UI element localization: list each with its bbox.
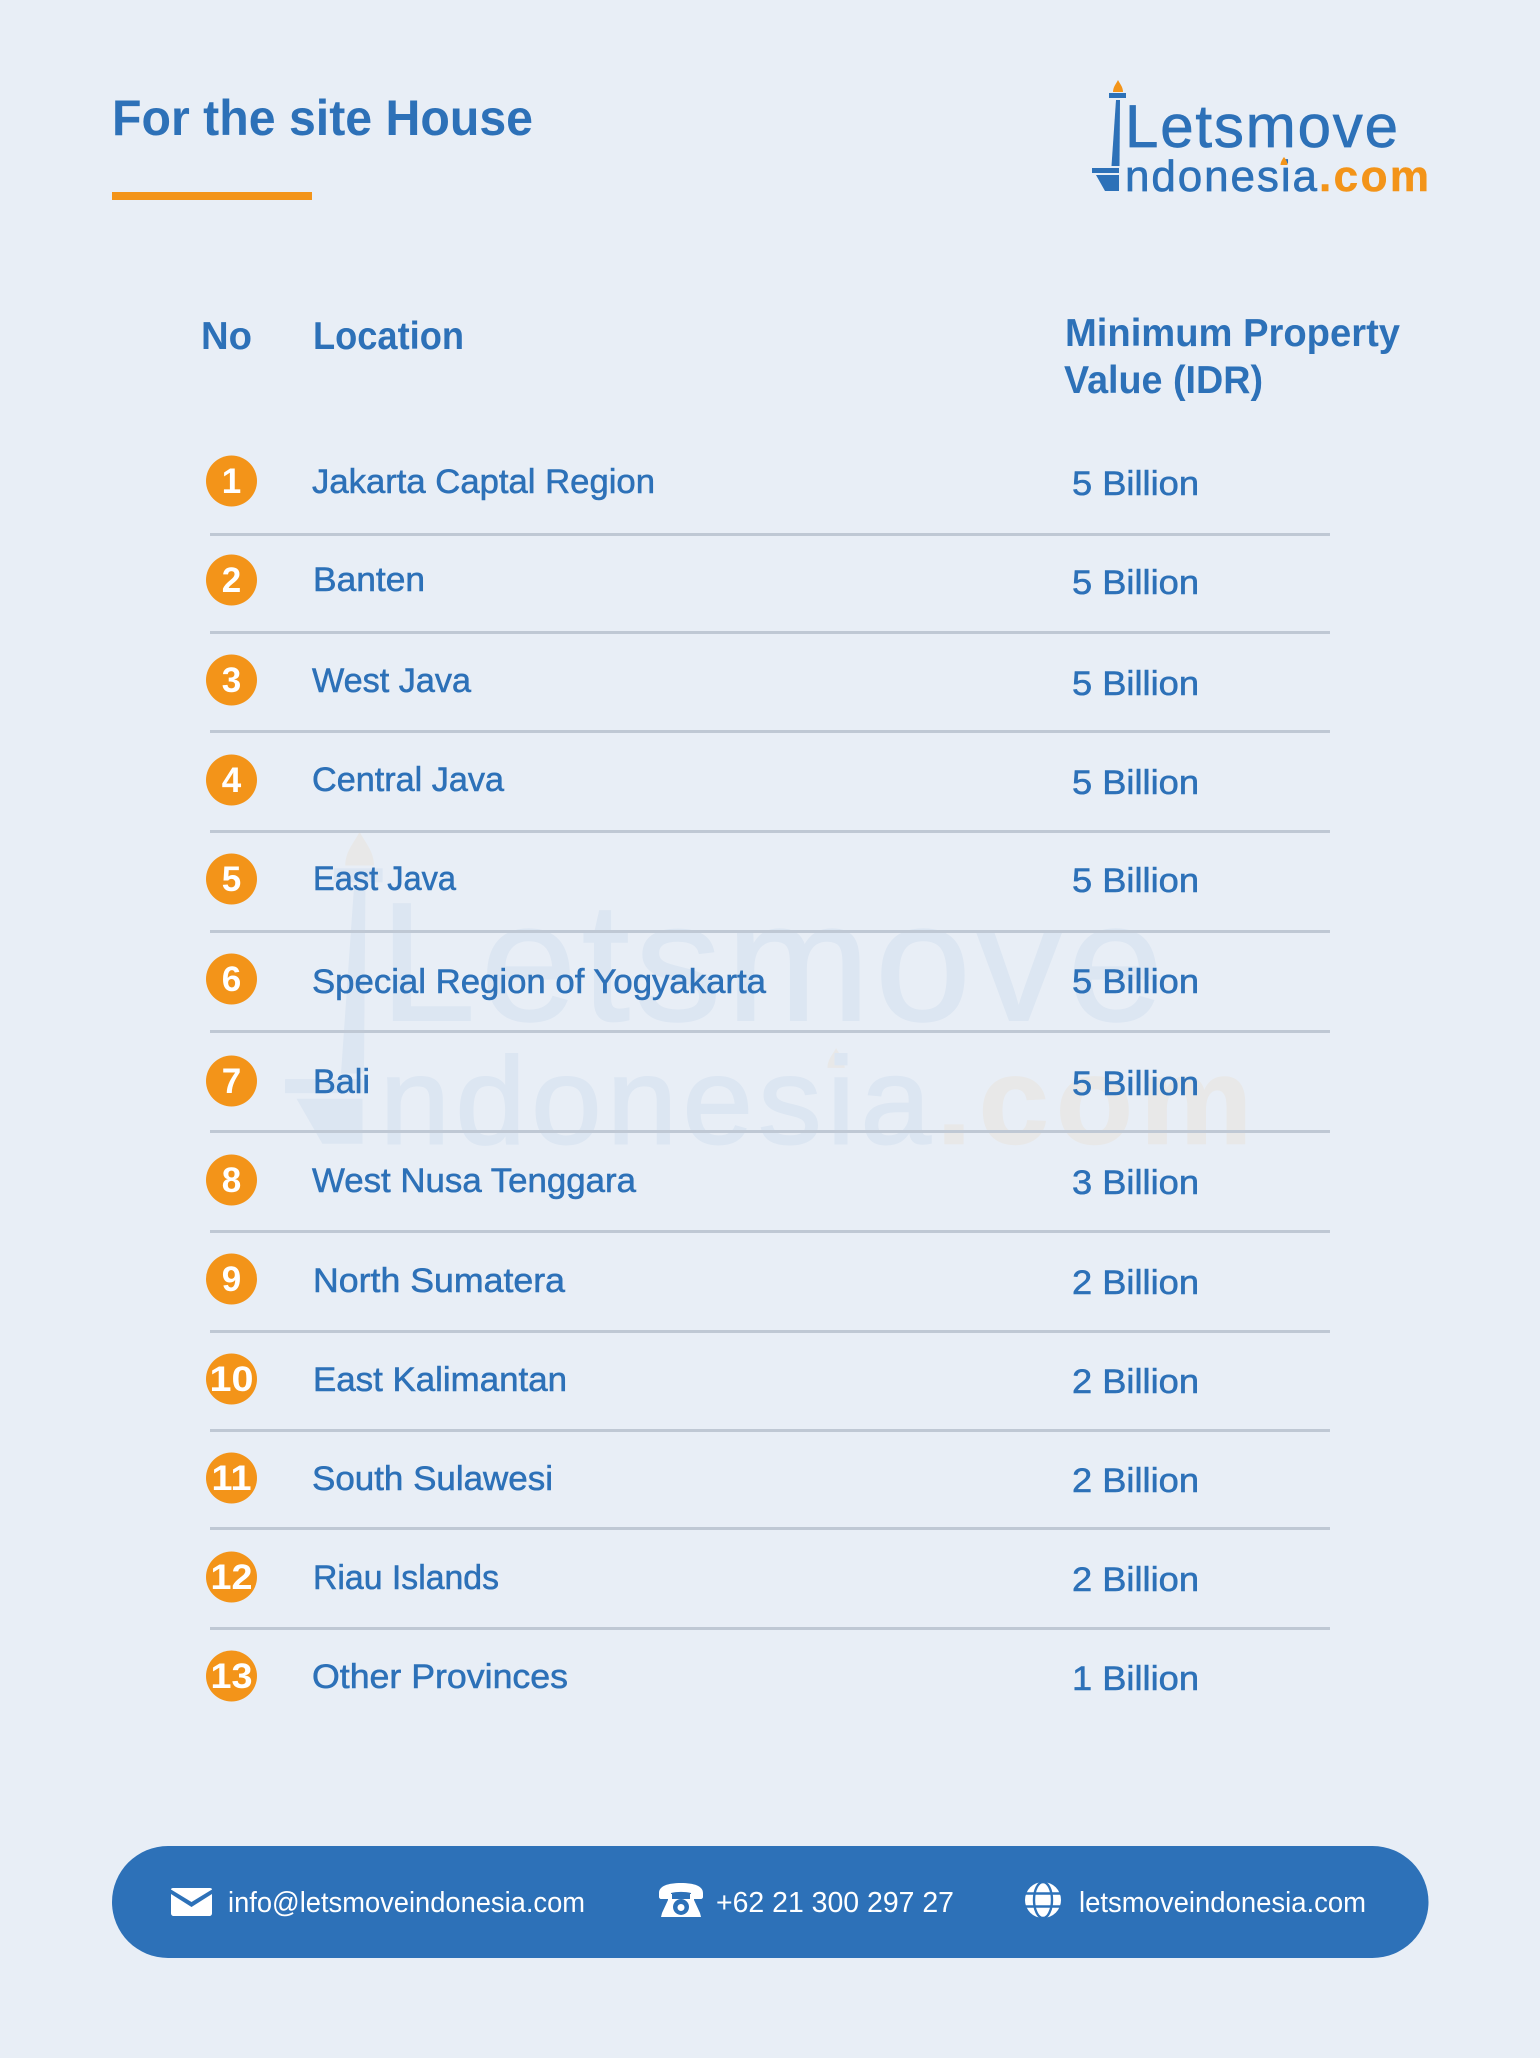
row 3 — [206, 654, 1330, 733]
row 10 — [206, 1354, 1330, 1432]
phone number: +62 21 300 297 27 — [716, 1887, 954, 1919]
row 8: 8 — [222, 1161, 241, 1200]
row 13: 1 Billion — [1072, 1660, 1199, 1698]
row 10: East Kalimantan — [313, 1361, 567, 1399]
row 1: 5 Billion — [1072, 465, 1199, 503]
table header: No: No — [201, 315, 252, 358]
row 5 — [206, 854, 1330, 933]
row 11: South Sulawesi — [312, 1460, 553, 1498]
row 6: Special Region of Yogyakarta — [312, 963, 766, 1001]
row 3: 5 Billion — [1072, 665, 1199, 703]
row 11 — [206, 1452, 1330, 1530]
table rows — [206, 456, 1330, 1702]
footer contact bar — [112, 1846, 1428, 1958]
watermark logo: Letsmove — [380, 869, 1163, 1057]
row 6: 6 — [222, 960, 241, 999]
row 1 — [206, 456, 1330, 536]
row 10: 10 — [210, 1360, 254, 1399]
row 2 — [206, 554, 1330, 634]
row 7: 7 — [222, 1062, 241, 1101]
table header: Minimum Property Value — [1064, 312, 1400, 402]
row 13: 13 — [210, 1657, 252, 1696]
email address: info@letsmoveindonesia.com — [228, 1887, 585, 1919]
row 2: Banten — [313, 561, 425, 599]
logo — [1092, 80, 1429, 201]
row 9: 2 Billion — [1072, 1264, 1199, 1302]
row 13: Other Provinces — [312, 1658, 568, 1696]
icon: monument — [1092, 80, 1126, 191]
row 12: 12 — [210, 1558, 252, 1597]
watermark logo — [285, 832, 1252, 1170]
row 7: 5 Billion — [1072, 1065, 1199, 1103]
row 12: Riau Islands — [313, 1559, 499, 1597]
row 8 — [206, 1154, 1330, 1233]
row 2: 5 Billion — [1072, 564, 1199, 602]
row 11: 11 — [212, 1459, 252, 1498]
row 4: 5 Billion — [1072, 764, 1199, 802]
row 4: 4 — [222, 761, 242, 800]
icon: globe — [1024, 1882, 1062, 1918]
icon: small flame — [1280, 157, 1288, 165]
row 3: 3 — [222, 661, 241, 700]
icon: envelope — [171, 1888, 212, 1916]
title: For the site House — [112, 90, 533, 146]
row 9: 9 — [222, 1260, 241, 1299]
row 6 — [206, 954, 1330, 1033]
watermark logo: .com — [937, 1033, 1252, 1170]
icon: telephone — [659, 1883, 703, 1917]
row 5: 5 Billion — [1072, 862, 1199, 900]
row 12: 2 Billion — [1072, 1561, 1199, 1599]
row 11: 2 Billion — [1072, 1462, 1199, 1500]
row 6: 5 Billion — [1072, 963, 1199, 1001]
row 12 — [206, 1552, 1330, 1630]
table header: Location: Location — [313, 315, 464, 358]
row 2: 2 — [222, 561, 241, 600]
row 8: West Nusa Tenggara — [312, 1162, 636, 1200]
row 9: North Sumatera — [313, 1262, 565, 1300]
row 8: 3 Billion — [1072, 1164, 1199, 1202]
website: letsmoveindonesia.com — [1079, 1887, 1366, 1919]
logo word: .com: .com — [1319, 152, 1429, 201]
row 3: West Java — [312, 662, 471, 700]
watermark logo: ndonesia — [380, 1033, 931, 1170]
table header: Minimum Property Value: Value (IDR) — [1064, 359, 1263, 402]
row 7: Bali — [313, 1063, 370, 1101]
row 4: Central Java — [312, 761, 504, 799]
row 5: 5 — [222, 860, 241, 899]
row 7 — [206, 1056, 1330, 1133]
table header: Minimum Property Value: Minimum Property — [1065, 312, 1400, 355]
row 5: East Java — [313, 860, 456, 898]
row 1: Jakarta Captal Region — [312, 463, 655, 501]
row 10: 2 Billion — [1072, 1363, 1199, 1401]
row 13 — [206, 1650, 1199, 1702]
row 9 — [206, 1254, 1330, 1333]
title underline — [112, 192, 312, 200]
logo word: ndonesia: ndonesia — [1125, 152, 1318, 201]
logo word: Letsmove: Letsmove — [1125, 93, 1398, 160]
row 1: 1 — [222, 462, 241, 501]
row 4 — [206, 754, 1330, 833]
